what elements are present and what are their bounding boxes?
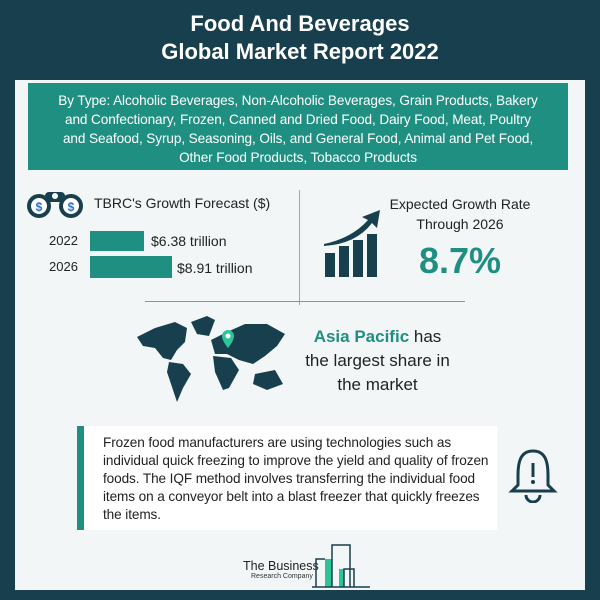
type list box: and Seafood, Syrup, Seasoning, Oils, and General Food, Animal and Pet Food, [63, 131, 533, 146]
callout: frozen food: foods. The IQF method involves transferring the individual food [103, 471, 475, 486]
callout: frozen food: the items. [103, 507, 161, 522]
bar 2026 [49, 256, 252, 278]
text: Asia Pacific: Asia Pacific has the largest share in the market [305, 327, 450, 394]
logo: Research Company [251, 573, 313, 580]
icon: binoculars [27, 192, 83, 218]
type list box: Other Food Products, Tobacco Products [179, 150, 417, 165]
icon: growth chart [324, 210, 380, 277]
type list box: By Type: Alcoholic Beverages, Non-Alcoholic Beverages, Grain Products, Bakery [58, 93, 538, 108]
title [161, 11, 439, 64]
bar 2022 [49, 231, 226, 251]
heading: growth forecast: TBRC's Growth Forecast ($) [94, 195, 270, 211]
growth rate text: Through 2026 [416, 216, 504, 232]
callout: frozen food: Frozen food manufacturers are using technologies such as [103, 435, 451, 450]
bar 2026: $8.91 trillion [177, 260, 252, 276]
logo [243, 544, 370, 588]
callout: frozen food: individual quick freezing to improve the yield and quality of frozen [103, 453, 488, 468]
growth rate text [390, 196, 530, 232]
type list box: and Confectionary, Frozen, Canned and Dried Food, Dairy Food, Meat, Poultry [65, 112, 531, 127]
icon: bell [508, 450, 558, 503]
bar 2022: $6.38 trillion [151, 233, 226, 249]
bar 2026: 2026 [49, 259, 78, 274]
bar chart [49, 231, 252, 278]
title: Global Market Report 2022 [161, 39, 439, 64]
bar 2022: 2022 [49, 233, 78, 248]
growth rate value: 8.7% [419, 240, 501, 281]
callout: frozen food: items on a conveyor belt into a blast freezer that quickly freezes [103, 489, 479, 504]
icon: binoculars: $ [68, 200, 75, 214]
type list box [28, 83, 568, 170]
title: Food And Beverages [190, 11, 410, 36]
callout: frozen food [77, 426, 497, 530]
logo: The Business [243, 559, 319, 573]
icon: binoculars: $ [36, 200, 43, 214]
icon: world map [137, 316, 285, 402]
growth rate text: Expected Growth Rate [390, 196, 530, 212]
